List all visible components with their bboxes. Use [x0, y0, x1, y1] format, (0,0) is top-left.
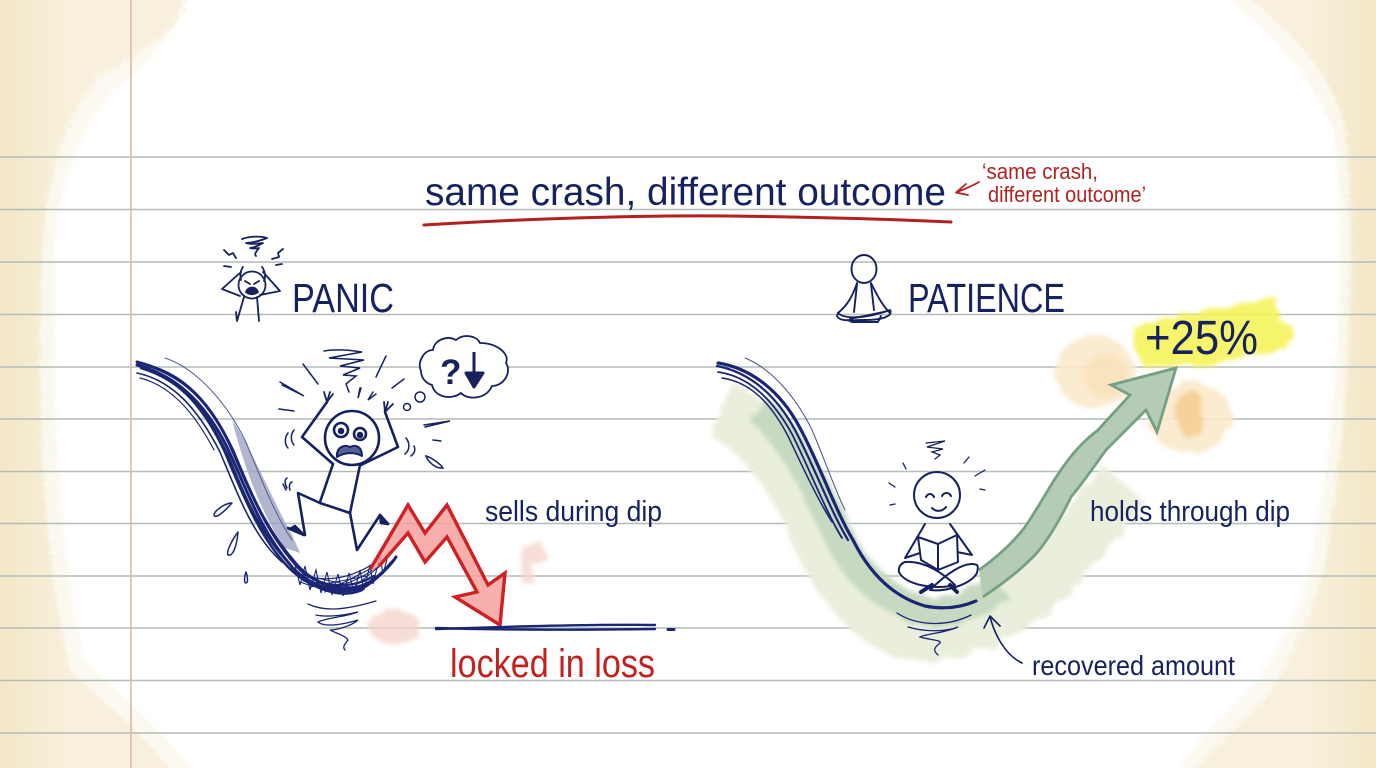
icon: meditating figure	[837, 255, 891, 322]
vibration squiggle	[897, 613, 971, 655]
sweat drops	[214, 503, 248, 583]
red down arrow	[371, 505, 505, 625]
red wash blot	[369, 610, 421, 644]
question mark: ?	[440, 353, 461, 392]
dip curve	[717, 358, 976, 608]
shaded crash band	[232, 420, 300, 553]
annotation text: ‘same crash,	[982, 159, 1098, 184]
ruled lines	[0, 157, 1376, 733]
orange wash blots	[1055, 336, 1232, 453]
panicking stick figure	[288, 392, 398, 550]
label: locked in loss: locked in loss	[450, 642, 655, 686]
panel: patience chart	[717, 298, 1292, 681]
open book	[918, 535, 958, 570]
down arrow	[466, 352, 483, 387]
heading text: PATIENCE	[908, 275, 1065, 321]
title: same crash, different outcome	[425, 171, 946, 214]
yellow highlight	[1131, 298, 1292, 368]
calm glow marks	[889, 441, 985, 505]
annotation: same crash, different outcome	[956, 159, 1146, 207]
margin line	[130, 0, 132, 768]
impact squiggle	[308, 601, 376, 650]
label: holds through dip: holds through dip	[1090, 496, 1290, 528]
recovered pointer arrow	[984, 616, 1022, 663]
green rising arrow	[979, 368, 1176, 597]
body	[905, 524, 972, 558]
label: sells during dip: sells during dip	[485, 496, 662, 528]
crossed legs	[899, 562, 978, 590]
calm reading figure	[899, 472, 978, 592]
thought bubble	[404, 336, 508, 410]
patience heading	[837, 255, 1065, 322]
icon: stressed stick figure	[222, 237, 283, 321]
annotation text: different outcome’	[988, 182, 1146, 207]
arms and hands	[302, 402, 398, 465]
flat loss line	[436, 625, 674, 630]
crash curve	[137, 358, 396, 596]
label: recovered amount: recovered amount	[1032, 650, 1235, 681]
panic stress marks	[279, 350, 450, 490]
green wash band	[722, 410, 1125, 632]
head and smile	[914, 472, 960, 518]
red wash blot small	[522, 541, 548, 582]
panel: panic chart	[137, 336, 674, 686]
body and legs	[320, 464, 360, 513]
annotation arrow	[956, 182, 979, 195]
panic heading	[222, 237, 394, 321]
title underline	[424, 216, 951, 225]
title block	[424, 171, 951, 225]
head and face	[325, 411, 379, 465]
callout: +25%: +25%	[1145, 312, 1258, 365]
heading text: PANIC	[292, 275, 394, 321]
